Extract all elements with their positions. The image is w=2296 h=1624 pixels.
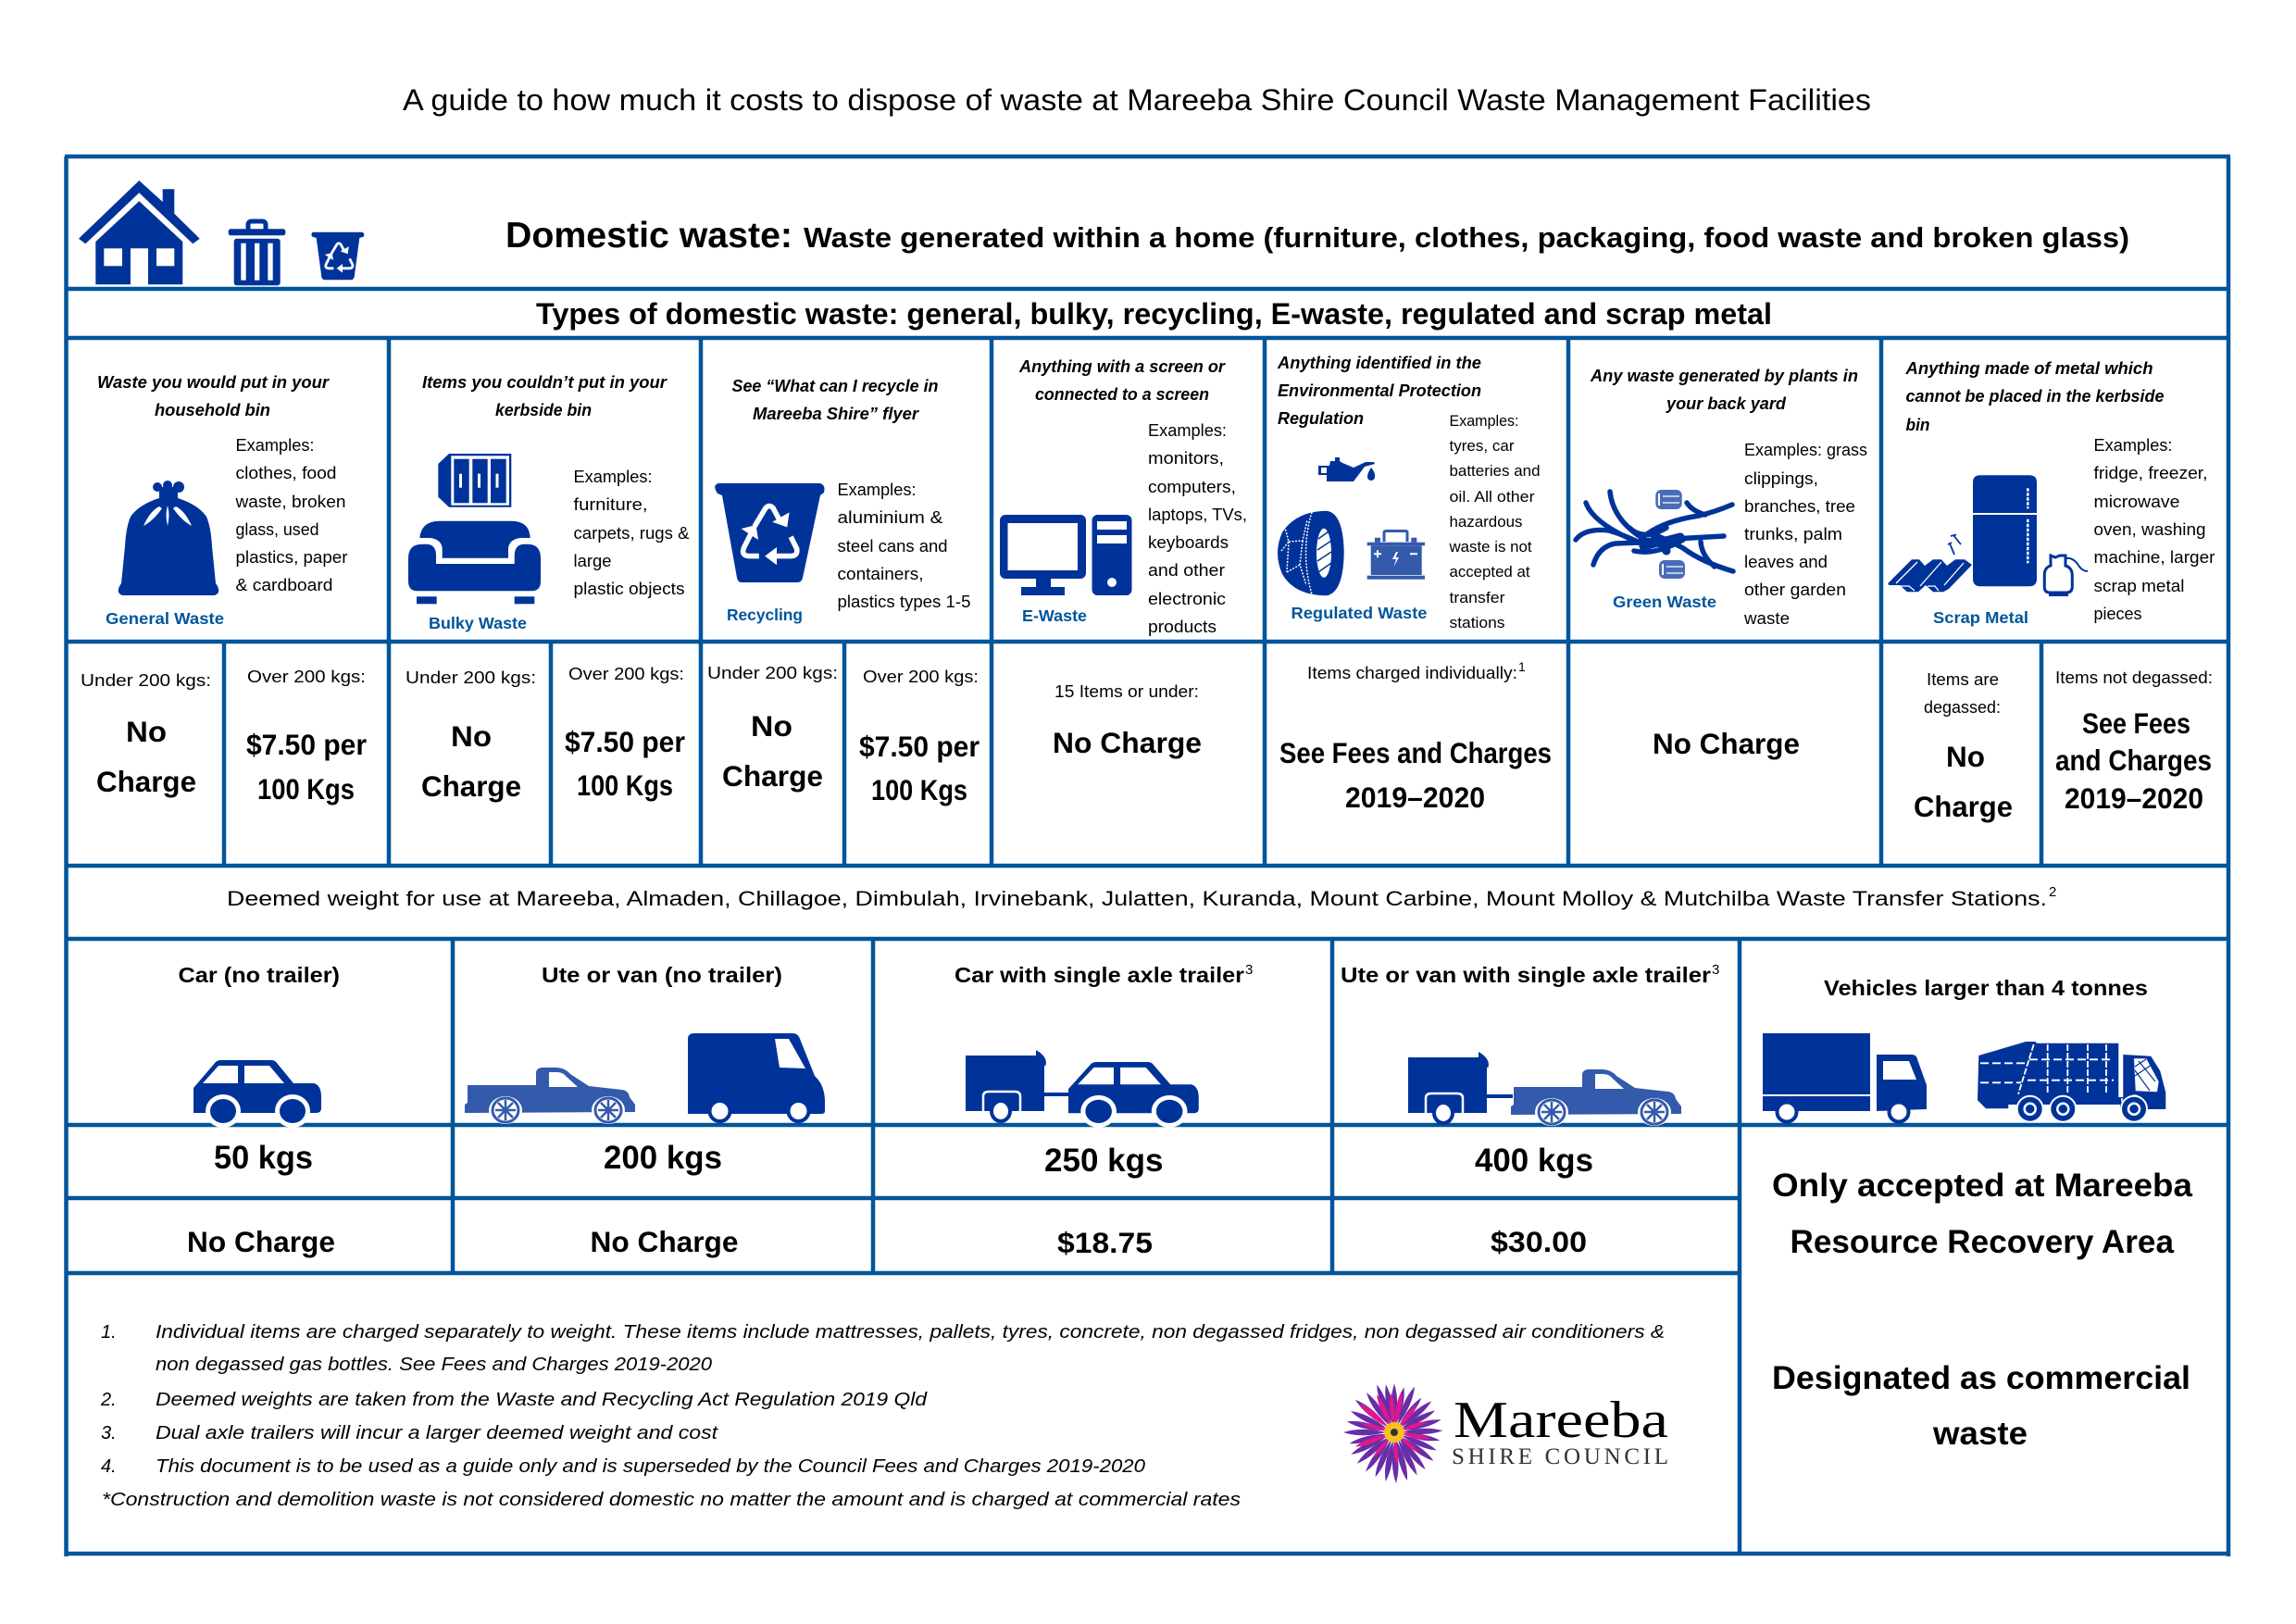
column: car with single axle trailer: [955, 962, 1253, 1259]
panel: e-waste: keyboards: [1148, 532, 1229, 552]
panel: domestic waste header: [79, 181, 2129, 285]
rate: items charged individually: 2019–2020: [1345, 781, 1485, 814]
icon: house: [79, 181, 200, 284]
icon: tyre: [1278, 511, 1344, 595]
column: car with single axle trailer: 250 kgs: [1044, 1143, 1163, 1179]
panel: bulky waste: [406, 373, 690, 803]
rate: over 200 kgs: $7.50 per: [565, 725, 685, 758]
footnotes: Individual items are charged separately to weight. These items include mattresses, pallets, tyres, concrete, non degassed fridges, non degassed air conditioners &: [156, 1322, 1665, 1343]
note: only accepted at Mareeba: Only accepted at Mareeba: [1772, 1168, 2193, 1204]
footnotes: 4.: [101, 1456, 117, 1477]
panel: scrap metal: machine, larger: [2094, 547, 2215, 567]
panel: general waste: [81, 373, 367, 806]
panel: general waste: Waste you would put in your: [97, 373, 330, 392]
footnotes: [100, 1322, 1665, 1510]
panel: e-waste: laptops, TVs,: [1148, 505, 1247, 524]
panel: regulated waste: Environmental Protection: [1278, 381, 1481, 400]
rate: 15 items or under: No Charge: [1053, 726, 1202, 759]
panel: bulky waste: Items you couldn’t put in your: [422, 373, 668, 392]
panel: green waste: clippings,: [1744, 468, 1818, 488]
panel: recycling: Examples:: [837, 480, 917, 499]
panel: scrap metal: Examples:: [2094, 435, 2172, 455]
rate: items charged individually: Items charged individually:: [1307, 663, 1517, 682]
rate: under 200 kgs: No: [751, 709, 792, 743]
footnotes: non degassed gas bottles. See Fees and Charges 2019-2020: [156, 1355, 712, 1375]
rate: under 200 kgs: [81, 670, 211, 798]
panel: general waste: clothes, food: [235, 463, 337, 482]
panel: green waste: [1576, 367, 1867, 760]
panel: bulky waste: Examples:: [574, 467, 652, 486]
rate: items not degassed: 2019–2020: [2065, 781, 2203, 815]
panel: green waste: waste: [1743, 608, 1790, 628]
panel: general waste: plastics, paper: [235, 547, 348, 567]
panel: green waste: your back yard: [1666, 394, 1787, 413]
panel: bulky waste: kerbside bin: [495, 401, 592, 419]
panel: regulated waste: oil. All other: [1450, 489, 1535, 506]
panel: regulated waste: Anything identified in the: [1277, 354, 1481, 372]
footnotes: *Construction and demolition waste is not considered domestic no matter the amount and is charged at commercial rates: [102, 1490, 1241, 1510]
panel: general waste: waste, broken: [234, 492, 346, 511]
panel: recycling: Recycling: [727, 606, 803, 624]
icon: rubbish bin: [229, 221, 285, 285]
panel: recycling: See “What can I recycle in: [731, 377, 939, 395]
panel: green waste: Green Waste: [1613, 593, 1716, 611]
footnotes: 1.: [101, 1322, 117, 1343]
panel: scrap metal: oven, washing: [2094, 519, 2205, 539]
column: car with single axle trailer: 3: [1245, 962, 1253, 978]
rate: under 200 kgs: Charge: [722, 759, 823, 793]
heading: domestic waste: Domestic waste:: [505, 216, 792, 256]
icon: rubbish bag: [119, 481, 218, 595]
column: ute or van no trailer: No Charge: [591, 1225, 739, 1258]
rate: over 200 kgs: 100 Kgs: [257, 772, 355, 806]
icon: branches and logs: [1576, 490, 1733, 579]
rate: items degassed: No: [1946, 740, 1985, 773]
rate: 15 items or under: 15 Items or under:: [1054, 681, 1199, 701]
rate: items degassed: Charge: [1914, 790, 2013, 823]
panel: bulky waste: plastic objects: [574, 579, 685, 598]
rate: under 200 kgs: [707, 663, 838, 793]
column: car no trailer: [178, 963, 340, 1258]
panel: e-waste: Anything with a screen or: [1018, 357, 1226, 376]
icon: flower: [1343, 1383, 1443, 1483]
panel: scrap metal: pieces: [2094, 604, 2142, 623]
rate: under 200 kgs: Under 200 kgs:: [81, 670, 211, 690]
column: car no trailer: Car (no trailer): [178, 963, 340, 987]
panel: bulky waste: Bulky Waste: [429, 614, 527, 632]
icon: ute: [465, 1068, 635, 1124]
icon: car and trailer: [966, 1050, 1199, 1128]
rate: under 200 kgs: Charge: [96, 765, 196, 798]
heading: domestic waste: Waste generated within a home (furniture, clothes, packaging, food waste and broken glass): [804, 221, 2129, 254]
column: car no trailer: 50 kgs: [214, 1140, 313, 1176]
icon: garbage truck: [1978, 1042, 2165, 1122]
rate: over 200 kgs: 100 Kgs: [871, 773, 967, 806]
panel: regulated waste: Regulated Waste: [1291, 604, 1428, 622]
rate: items not degassed: [2055, 668, 2213, 815]
panel: bulky waste: furniture,: [574, 494, 648, 514]
panel: regulated waste: Examples:: [1450, 413, 1518, 430]
panel: green waste: branches, tree: [1744, 496, 1855, 516]
panel: scrap metal: microwave: [2094, 492, 2179, 511]
panel: regulated waste: hazardous: [1450, 514, 1522, 531]
rate: items degassed: Items are: [1927, 669, 1999, 689]
panel: scrap metal: cannot be placed in the kerbside: [1905, 387, 2165, 406]
rate: over 200 kgs: 100 Kgs: [577, 768, 673, 802]
rate: under 200 kgs: No: [451, 719, 492, 753]
column: ute or van with single axle trailer: Ute or van with single axle trailer: [1341, 963, 1711, 987]
note: only accepted at Mareeba: [1772, 1168, 2193, 1260]
rate: over 200 kgs: $7.50 per: [859, 730, 980, 763]
note: only accepted at Mareeba: Resource Recovery Area: [1791, 1224, 2175, 1260]
panel: recycling: containers,: [837, 564, 924, 583]
note: designated as commercial waste: Designated as commercial: [1772, 1360, 2190, 1396]
column: ute or van with single axle trailer: 3: [1712, 962, 1719, 978]
deemed weight statement: 2: [2049, 884, 2056, 900]
panel: scrap metal: scrap metal: [2094, 576, 2185, 595]
column: car with single axle trailer: $18.75: [1057, 1226, 1153, 1259]
logo: Mareeba Shire Council: SHIRE COUNCIL: [1452, 1444, 1668, 1469]
deemed weight statement: Deemed weight for use at Mareeba, Almaden, Chillagoe, Dimbulah, Irvinebank, Julatten, Kuranda, Mount Carbine, Mount Molloy & Mutchilba Waste Transfer Stations.: [227, 887, 2047, 910]
rate: no charge: No Charge: [1653, 727, 1800, 760]
panel: bulky waste: carpets, rugs &: [574, 523, 690, 543]
panel: regulated waste: waste is not: [1448, 539, 1532, 556]
rate: over 200 kgs: [565, 664, 685, 802]
rate: under 200 kgs: Under 200 kgs:: [707, 663, 838, 682]
rate: items not degassed: and Charges: [2055, 743, 2212, 777]
rate: over 200 kgs: Over 200 kgs:: [568, 664, 684, 683]
icon: car: [193, 1060, 321, 1128]
panel: general waste: General Waste: [106, 609, 224, 628]
heading: types of domestic waste: Types of domestic waste: general, bulky, recycling, E-waste, regulated and scrap metal: [536, 297, 1772, 331]
panel: scrap metal: Anything made of metal which: [1904, 359, 2153, 378]
icon: recycling bin: [715, 483, 824, 582]
column: ute or van with single axle trailer: [1341, 962, 1719, 1258]
panel: green waste: trunks, palm: [1744, 524, 1842, 543]
rate: items charged individually: [1279, 659, 1552, 814]
column: vehicles larger than 4 tonnes: Vehicles larger than 4 tonnes: [1824, 976, 2148, 1000]
note: designated as commercial waste: waste: [1932, 1416, 2028, 1452]
panel: regulated waste: tyres, car: [1450, 438, 1515, 455]
panel: regulated waste: transfer: [1450, 590, 1505, 606]
logo: Mareeba Shire Council: [1343, 1383, 1668, 1483]
panel: regulated waste: stations: [1450, 615, 1505, 631]
heading: domestic waste: [505, 216, 2129, 256]
panel: regulated waste: accepted at: [1450, 564, 1530, 581]
panel: recycling: Mareeba Shire” flyer: [753, 405, 919, 423]
panel: scrap metal: [1888, 359, 2215, 823]
panel: green waste: Any waste generated by plants in: [1590, 367, 1858, 385]
rate: items charged individually: 1: [1518, 659, 1526, 674]
rate: items not degassed: Items not degassed:: [2055, 668, 2213, 687]
panel: scrap metal: fridge, freezer,: [2094, 463, 2207, 482]
icon: oil can: [1318, 457, 1375, 481]
column: vehicles larger than 4 tonnes: [1763, 976, 2193, 1452]
panel: recycling: steel cans and: [837, 536, 948, 556]
panel: scrap metal: Scrap Metal: [1933, 608, 2028, 627]
panel: recycling: [707, 377, 980, 806]
column: car no trailer: No Charge: [187, 1225, 335, 1258]
rate: over 200 kgs: Over 200 kgs:: [863, 667, 979, 686]
panel: e-waste: computers,: [1148, 477, 1236, 496]
icon: wardrobe and sofa: [408, 454, 541, 604]
column: car with single axle trailer: Car with single axle trailer: [955, 963, 1244, 987]
logo: Mareeba Shire Council: Mareeba: [1454, 1392, 1668, 1449]
panel: e-waste: monitors,: [1148, 448, 1224, 468]
panel: regulated waste: batteries and: [1450, 463, 1541, 480]
icon: car battery: [1367, 531, 1425, 580]
rate: under 200 kgs: Under 200 kgs:: [406, 668, 536, 687]
title: A guide to how much it costs to dispose of waste at Mareeba Shire Council Waste Management Facilities: [403, 83, 1871, 117]
rate: items degassed: [1914, 669, 2013, 823]
panel: e-waste: [1000, 357, 1247, 759]
rate: items charged individually: See Fees and Charges: [1279, 736, 1552, 769]
panel: e-waste: E-Waste: [1022, 606, 1087, 625]
panel: regulated waste: [1277, 354, 1552, 814]
rate: over 200 kgs: Over 200 kgs:: [247, 667, 366, 686]
note: designated as commercial waste: [1772, 1360, 2190, 1452]
panel: general waste: & cardboard: [235, 575, 333, 594]
panel: e-waste: and other: [1148, 560, 1225, 580]
footnotes: 3.: [101, 1423, 117, 1443]
panel: general waste: Examples:: [235, 435, 315, 455]
column: ute or van no trailer: 200 kgs: [604, 1140, 722, 1176]
panel: bulky waste: large: [574, 551, 611, 570]
panel: green waste: Examples: grass: [1744, 440, 1867, 459]
rate: 15 items or under: [1053, 681, 1202, 759]
panel: scrap metal: bin: [1905, 416, 1929, 434]
icon: ute and trailer: [1408, 1052, 1681, 1126]
panel: regulated waste: Regulation: [1278, 409, 1364, 428]
column: ute or van no trailer: Ute or van (no trailer): [542, 963, 782, 987]
icon: recycling bin small: [311, 232, 364, 280]
rate: over 200 kgs: [246, 667, 367, 806]
panel: green waste: other garden: [1744, 580, 1846, 599]
column: ute or van no trailer: [465, 963, 825, 1258]
column: ute or van with single axle trailer: $30.00: [1491, 1225, 1587, 1258]
icon: van: [688, 1033, 825, 1121]
rate: over 200 kgs: [859, 667, 980, 806]
icon: fridge, roofing and gas bottle: [1888, 475, 2088, 596]
panel: e-waste: electronic: [1148, 589, 1226, 608]
rate: under 200 kgs: No: [126, 715, 167, 748]
panel: e-waste: Examples:: [1148, 420, 1227, 440]
panel: general waste: glass, used: [235, 519, 318, 539]
footnotes: 2.: [100, 1390, 117, 1410]
panel: e-waste: products: [1148, 617, 1217, 636]
icon: computer: [1000, 515, 1131, 595]
panel: recycling: aluminium &: [837, 507, 943, 527]
rate: items degassed: degassed:: [1924, 697, 2001, 717]
rate: items not degassed: See Fees: [2082, 706, 2190, 740]
panel: recycling: plastics types 1-5: [837, 592, 970, 611]
column: ute or van with single axle trailer: 400 kgs: [1475, 1143, 1593, 1179]
rate: over 200 kgs: $7.50 per: [246, 728, 367, 761]
icon: box truck: [1763, 1033, 1927, 1122]
footnotes: This document is to be used as a guide only and is superseded by the Council Fees and Charges 2019-2020: [156, 1456, 1145, 1477]
rate: under 200 kgs: Charge: [421, 769, 521, 803]
footnotes: Dual axle trailers will incur a larger deemed weight and cost: [156, 1423, 719, 1443]
footnotes: Deemed weights are taken from the Waste and Recycling Act Regulation 2019 Qld: [156, 1390, 928, 1410]
panel: e-waste: connected to a screen: [1035, 385, 1209, 404]
panel: general waste: household bin: [155, 401, 270, 419]
panel: green waste: leaves and: [1744, 552, 1828, 571]
rate: under 200 kgs: [406, 668, 536, 803]
